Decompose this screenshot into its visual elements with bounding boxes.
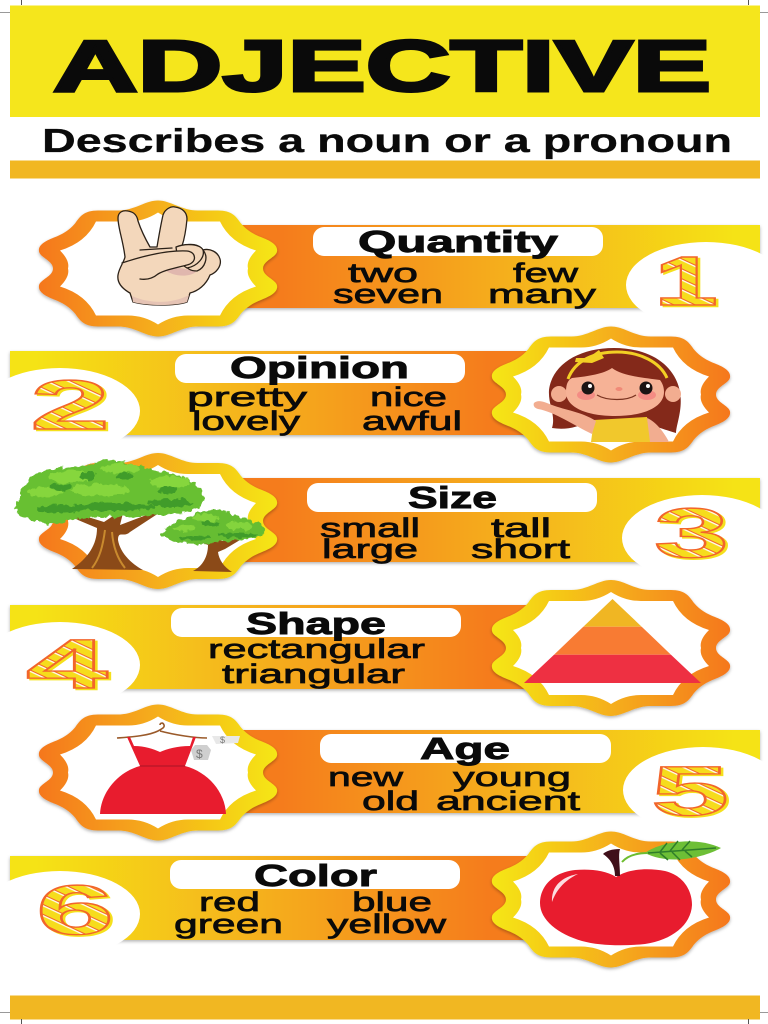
bar	[240, 478, 760, 562]
number circle	[626, 242, 768, 328]
icon: two trees	[16, 461, 266, 572]
words: young	[453, 762, 571, 792]
heading pill	[307, 483, 597, 512]
heading: Age	[420, 731, 510, 766]
number circle	[0, 368, 140, 454]
words: lovely	[192, 406, 301, 436]
price tags: $	[196, 747, 203, 761]
words: triangular	[222, 659, 405, 689]
badge	[492, 580, 730, 716]
words: large	[322, 534, 418, 564]
heading: Shape	[246, 606, 386, 641]
icon: red dress on hanger	[100, 723, 240, 814]
words: awful	[362, 406, 462, 436]
bar	[240, 225, 760, 308]
words	[320, 513, 571, 564]
top band	[10, 160, 760, 178]
row 1: quantity	[39, 200, 768, 336]
row 5: age	[39, 704, 768, 840]
number 5: 5	[651, 752, 729, 830]
number circle	[622, 495, 768, 581]
words	[174, 887, 447, 939]
badge	[492, 326, 730, 462]
heading: Size	[408, 480, 497, 515]
row 4: shape	[0, 580, 730, 716]
words: two	[348, 258, 418, 288]
number 2: 2	[30, 366, 110, 444]
badge	[39, 453, 277, 589]
price tags	[191, 735, 240, 761]
title banner	[10, 6, 760, 117]
title: ADJECTIVE	[53, 27, 711, 107]
words: rectangular	[208, 634, 425, 664]
row 3: size	[16, 453, 768, 589]
words: few	[513, 258, 579, 288]
number circle	[623, 747, 768, 833]
words: yellow	[327, 909, 447, 939]
number 3: 3	[654, 494, 729, 572]
words	[328, 762, 581, 816]
words: tall	[491, 513, 551, 543]
badge	[492, 832, 730, 968]
badge	[39, 200, 277, 336]
words: many	[488, 279, 597, 309]
number 4: 4	[26, 625, 108, 703]
words: green	[174, 909, 283, 939]
words: short	[471, 534, 571, 564]
words: new	[328, 762, 404, 792]
heading: Opinion	[230, 350, 409, 385]
bottom band	[10, 996, 760, 1020]
words: nice	[370, 382, 447, 412]
words: small	[320, 513, 420, 543]
bar	[10, 856, 530, 940]
words: blue	[352, 887, 432, 917]
number circle	[0, 871, 140, 957]
row 6: color	[0, 832, 730, 968]
bar	[10, 605, 530, 689]
words: red	[199, 887, 260, 917]
icon: hand showing two fingers	[118, 207, 220, 305]
badge	[39, 704, 277, 840]
heading pill	[171, 608, 461, 637]
words: ancient	[436, 786, 581, 816]
icon: girl waving	[534, 348, 681, 442]
heading pill	[320, 734, 611, 763]
subtitle: Describes a noun or a pronoun	[42, 122, 732, 159]
icon: layered pyramid	[524, 599, 701, 683]
words: pretty	[187, 382, 308, 412]
words: seven	[333, 279, 443, 309]
heading pill	[170, 860, 460, 889]
bar	[10, 351, 530, 435]
heading: Quantity	[358, 224, 559, 259]
bar	[240, 730, 760, 813]
number circle	[0, 622, 140, 708]
heading: Color	[254, 858, 377, 893]
words: old	[362, 786, 419, 816]
number 1: 1	[654, 242, 718, 320]
words	[333, 258, 597, 309]
price tags: $	[220, 735, 225, 745]
icon: red apple	[540, 841, 721, 945]
row 2: opinion	[0, 326, 730, 462]
words	[187, 382, 462, 436]
words	[208, 634, 425, 689]
heading pill	[313, 227, 603, 256]
heading pill	[175, 354, 465, 383]
number 6: 6	[36, 871, 114, 949]
